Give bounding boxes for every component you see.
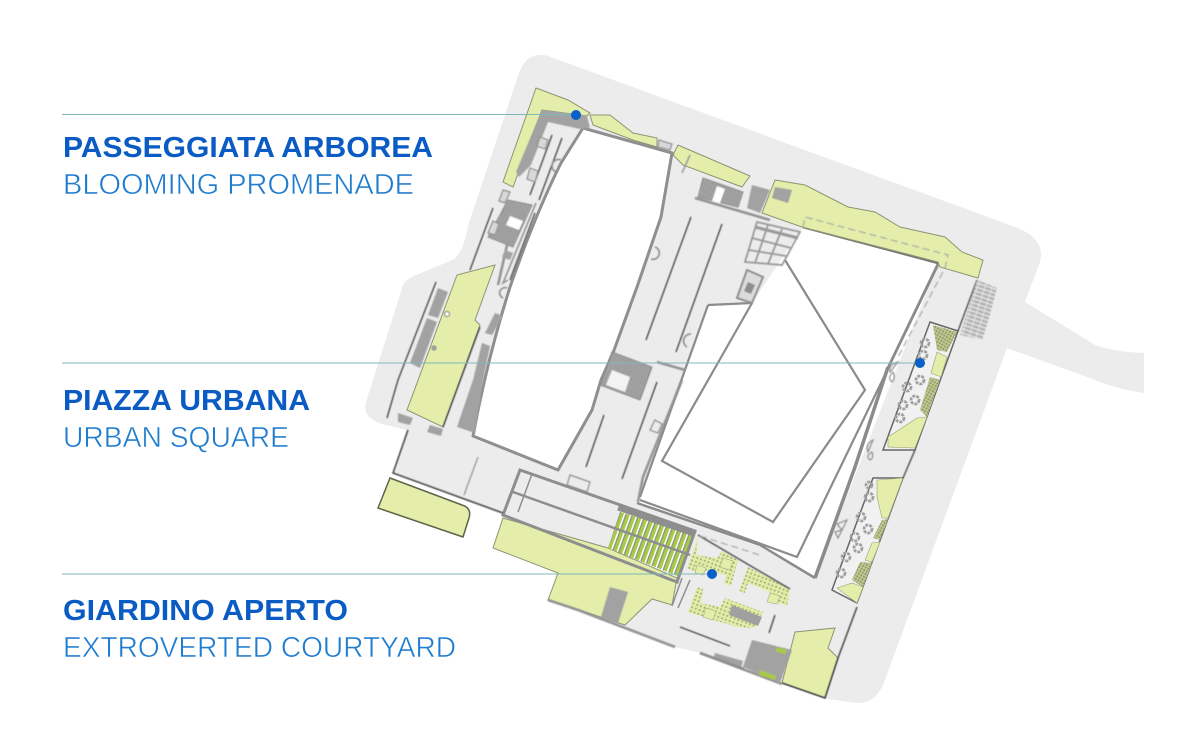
structural grid [745,222,800,265]
courtyard dashed rail [700,536,763,556]
label: giardino aperto [63,595,456,664]
east gardens [832,322,958,603]
green: south-east corner [782,628,838,698]
label: passeggiata arborea: BLOOMING PROMENADE [63,169,414,201]
building: west block [473,128,672,470]
green: south lawn [493,518,677,625]
north-west promenade gray edge [516,110,590,177]
label: piazza urbana: PIAZZA URBANA [63,385,310,417]
leader line: passeggiata arborea [62,114,576,116]
south-east service core [700,640,792,683]
green: north-west promenade [503,88,590,187]
planted slats pergola [503,470,695,608]
garden: upper east [883,322,958,450]
courtyard planting beds [687,537,790,628]
marker: passeggiata arborea [571,110,581,120]
white building footprints [473,128,938,578]
stairs: west passage [488,200,532,247]
brick paving [960,280,997,340]
site background and plan floor [365,55,1144,703]
label: piazza urbana [63,385,310,454]
label: giardino aperto: EXTROVERTED COURTYARD [63,632,456,664]
label: passeggiata arborea: PASSEGGIATA ARBOREA [63,132,433,164]
stairs: central landing [606,370,630,392]
gray service blocks [398,185,792,623]
label: passeggiata arborea [63,132,433,201]
courtyard paving block [729,605,762,626]
stairs: north [698,178,743,207]
stairs: central [600,352,652,400]
stairs: north landing [712,186,725,203]
doors and small fixtures [432,137,898,538]
garden: lower east [832,478,903,603]
building: inner outline [637,227,938,578]
green planting areas [378,88,983,698]
marker: giardino aperto [707,569,717,579]
green: north strip 1 [590,115,657,147]
green: south-west lawn [378,478,470,537]
gray thick walls [464,155,782,684]
bed north [687,537,738,586]
label: giardino aperto: GIARDINO APERTO [63,595,348,627]
machine room [737,270,763,303]
building: east block [638,227,938,578]
label: piazza urbana: URBAN SQUARE [63,422,289,454]
leader line: giardino aperto [62,573,712,575]
stairs landing [506,216,523,230]
dashed path [803,217,948,357]
green: west lawn [407,265,495,427]
green: north-east strip [762,180,983,278]
dark boundary lines [387,135,977,698]
leader line: piazza urbana [62,362,919,364]
walls, paths and structures [387,110,997,698]
courtyard green squares [695,558,780,620]
green: north strip 2 [673,145,750,187]
bed east [739,567,790,606]
marker: piazza urbana [915,358,925,368]
bed south [688,587,763,628]
